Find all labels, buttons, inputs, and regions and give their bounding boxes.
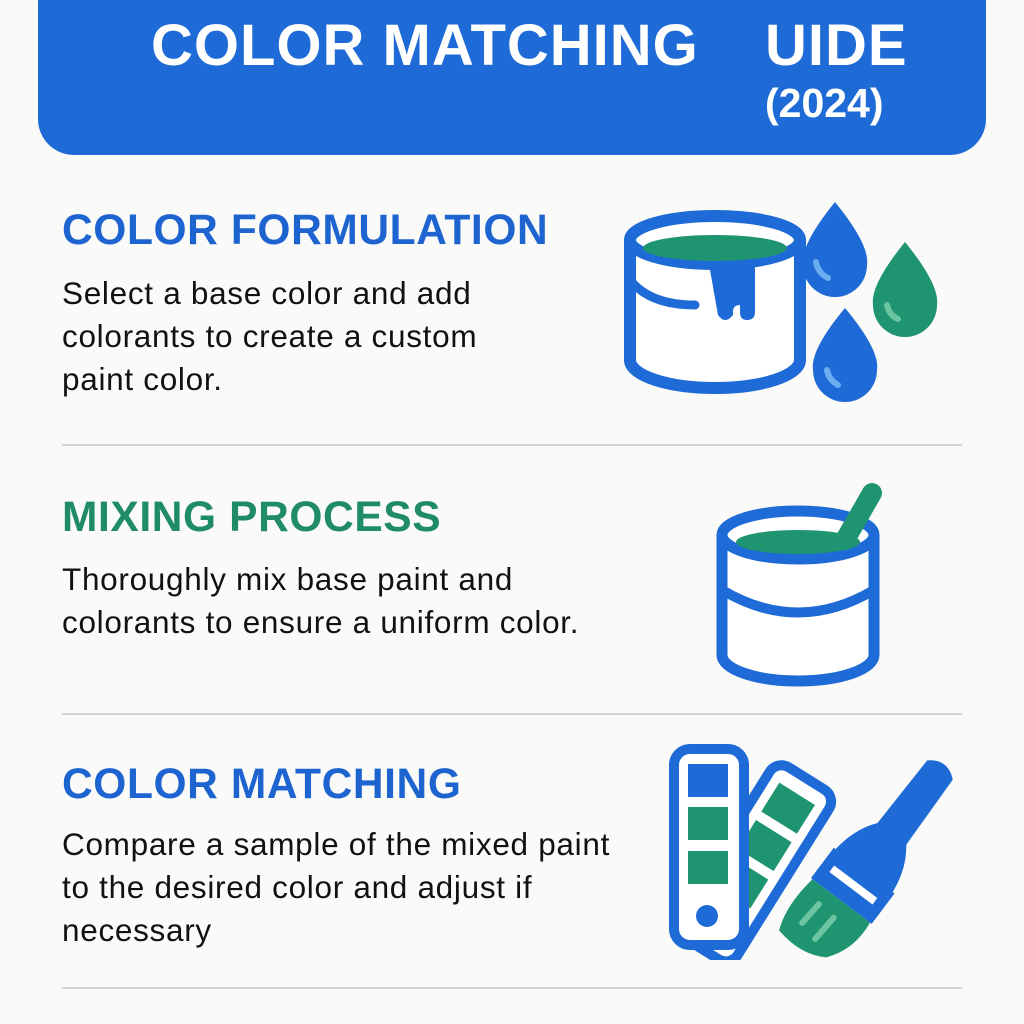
section heading: color formulation: COLOR FORMULATION [62, 207, 548, 254]
text: formulation: Select a base color and add [62, 275, 471, 311]
header banner [38, 0, 986, 155]
text: mixing: Thoroughly mix base paint and [62, 561, 513, 597]
text: matching [62, 826, 610, 948]
text: formulation: paint color. [62, 361, 223, 397]
text: mixing: colorants to ensure a uniform color. [62, 604, 579, 640]
icon: paint can with stick [716, 483, 882, 686]
title: UIDE [765, 13, 908, 78]
text: mixing [62, 561, 579, 640]
title: COLOR MATCHING [151, 13, 699, 78]
text: formulation: colorants to create a custom [62, 318, 477, 354]
icon: paint can with drops [624, 202, 938, 402]
text: formulation [62, 275, 477, 397]
year: (2024) [765, 80, 884, 126]
text: matching: Compare a sample of the mixed paint [62, 826, 610, 862]
text: matching: to the desired color and adjust if [62, 869, 532, 905]
text: matching: necessary [62, 912, 212, 948]
icon: swatch fan and brush [669, 744, 953, 960]
section heading: mixing process: MIXING PROCESS [62, 494, 441, 541]
section heading: color matching: COLOR MATCHING [62, 761, 462, 808]
